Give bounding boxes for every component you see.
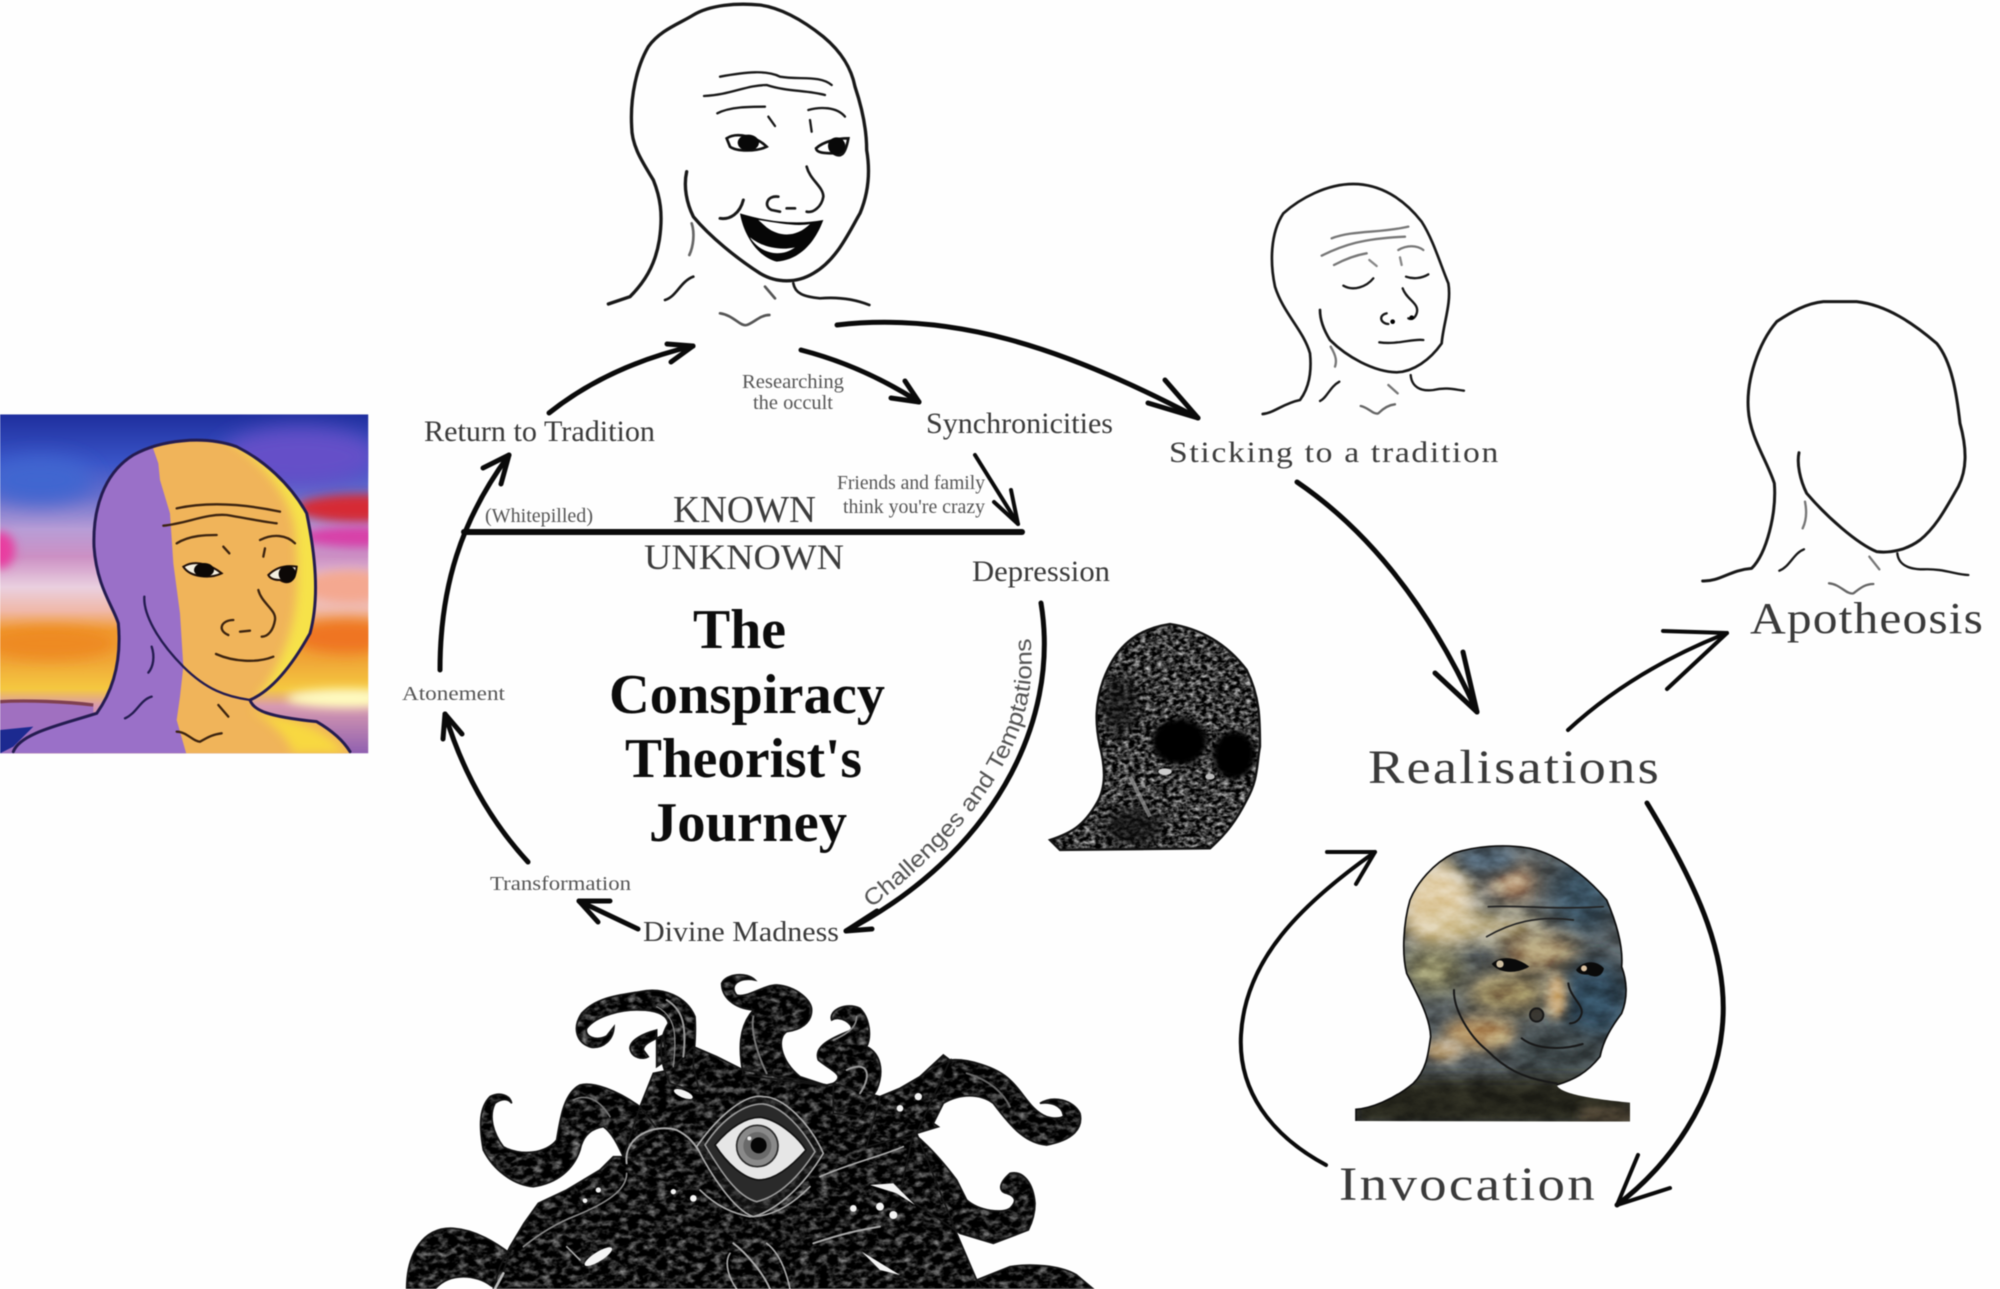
icon: tentacled eye creature: [407, 975, 1093, 1289]
arrow: researching to synchronicities: [801, 350, 919, 402]
arrow: realisations to apotheosis: [1568, 631, 1727, 730]
label: Researching the occult: Researching: [742, 371, 844, 393]
arrow: invocation to realisations: [1241, 852, 1375, 1165]
label: Divine Madness: Divine Madness: [643, 917, 839, 948]
arrow: return to tradition to wojak: [549, 344, 693, 413]
arrow: sticking to realisations: [1297, 482, 1477, 712]
label: KNOWN: KNOWN: [673, 489, 816, 531]
icon: happy wojak: [608, 4, 869, 325]
neck and face lines: [1320, 227, 1464, 414]
open mouth: [720, 200, 823, 262]
eyes: [727, 135, 848, 155]
label: Researching the occult: the occult: [753, 392, 833, 414]
outline: [1050, 624, 1260, 850]
panel: hero's journey circle: [402, 340, 1113, 948]
neck and collar lines: [665, 223, 869, 325]
label: Synchronicities: Synchronicities: [926, 407, 1113, 440]
inner ridges and highlights: [495, 1000, 1010, 1289]
head outline: [1703, 302, 1965, 581]
label: Transformation: Transformation: [490, 873, 631, 895]
cloud fill: [1353, 840, 1633, 1127]
panel: whitepilled wojak on sunset background: [0, 414, 370, 754]
textured silhouette: [1050, 624, 1260, 850]
label: Atonement: Atonement: [402, 683, 506, 705]
wojak outline: [13, 440, 350, 752]
wojak eyes: [183, 563, 297, 582]
head outline: [608, 4, 869, 304]
tentacle silhouette: [407, 975, 1093, 1289]
label: Friends and family think you're crazy: Friends and family: [837, 472, 985, 494]
arrow: divine madness to transformation: [579, 901, 638, 929]
title: [609, 599, 885, 854]
label: Return to Tradition: Return to Tradition: [424, 415, 655, 448]
curved label: Challenges and Temptations: Challenges and Temptations: [864, 638, 1032, 905]
eyes: [1492, 958, 1604, 976]
arrow: wojak to sticking to a tradition: [837, 322, 1198, 418]
arrow: atonement to return: [440, 455, 509, 670]
wojak face lines: [125, 504, 295, 742]
title: Theorist's: [625, 728, 862, 790]
arrow: realisations to invocation: [1617, 803, 1723, 1205]
face wrinkles: [704, 72, 845, 132]
white highlights: [582, 1087, 922, 1275]
wojak body purple and orange: [92, 440, 350, 754]
title: Conspiracy: [609, 664, 885, 726]
label: Friends and family think you're crazy: think you're crazy: [843, 496, 985, 518]
silhouette outline: [407, 975, 1093, 1289]
label: Depression: Depression: [972, 555, 1110, 588]
title: Journey: [649, 792, 847, 854]
icon: dark textured wojak: [1050, 624, 1260, 850]
label: UNKNOWN: UNKNOWN: [644, 537, 844, 577]
panel: outer path: [837, 322, 1984, 1211]
head outline: [1263, 184, 1449, 414]
neck lines: [1779, 502, 1968, 594]
arrow: transformation to atonement: [443, 714, 528, 862]
sunset sky: [0, 414, 370, 754]
arrow: synchronicities to threshold: [975, 455, 1018, 524]
label: Invocation: Invocation: [1339, 1158, 1597, 1211]
label: Realisations: Realisations: [1368, 741, 1661, 794]
nose: [767, 167, 823, 212]
facial lines: [1454, 906, 1603, 1083]
label: Researching the occult: [742, 371, 844, 414]
label: Apotheosis: Apotheosis: [1750, 594, 1984, 643]
icon: calm eyes-closed wojak: [1263, 184, 1464, 414]
title: The: [693, 599, 786, 661]
arrow: depression to divine madness: [846, 603, 1044, 931]
head outline: [1356, 846, 1626, 1121]
icon: faceless apotheosis wojak: [1703, 302, 1968, 594]
label: Friends and family think you're crazy: [837, 472, 985, 518]
icon: cloud-textured wojak: [1353, 840, 1633, 1127]
label: (Whitepilled): (Whitepilled): [485, 505, 593, 527]
label: Sticking to a tradition: Sticking to a tradition: [1169, 436, 1500, 469]
eye: [697, 1096, 823, 1217]
threshold line: [464, 529, 1022, 535]
eye sockets: [1100, 677, 1255, 847]
